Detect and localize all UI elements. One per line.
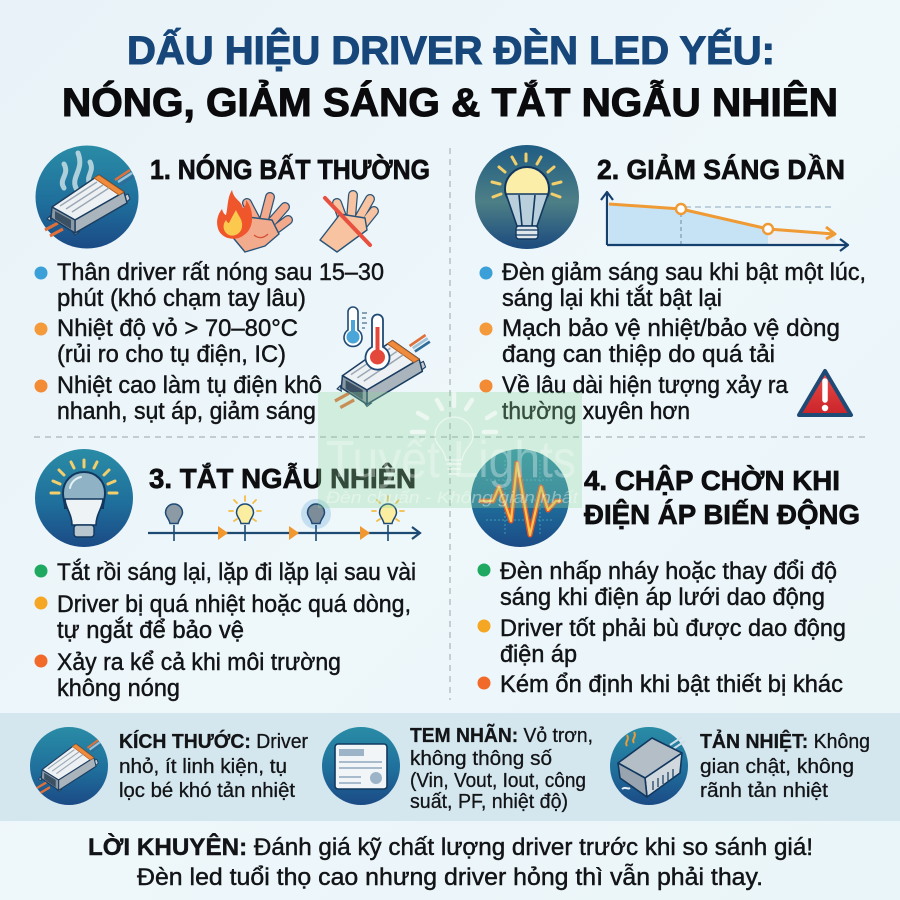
- bullet list: điện áp: [500, 641, 577, 668]
- text: kích thước: lọc bé khó tản nhiệt: [119, 780, 295, 802]
- bullet list: Xảy ra kể cả khi môi trường: [57, 649, 341, 676]
- icon: hot driver: [36, 146, 138, 248]
- bullet list: Đèn giảm sáng sau khi bật một lúc,: [502, 259, 866, 286]
- advice footer: LỜI KHUYÊN: Đánh giá kỹ chất lượng driver trước khi so sánh giá!: [88, 833, 813, 861]
- panel: 1. nóng bất thường: [34, 146, 430, 425]
- text: tản nhiệt: rãnh tản nhiệt: [700, 780, 828, 802]
- bullet list: Về lâu dài hiện tượng xảy ra: [502, 372, 788, 399]
- heading: 3. TẮT NGẪU NHIÊN: [149, 463, 416, 494]
- advice footer: Đèn led tuổi thọ cao nhưng driver hỏng thì vẫn phải thay.: [137, 864, 763, 891]
- text: kích thước: nhỏ, ít linh kiện, tụ: [119, 756, 287, 778]
- bullet list: Nhiệt độ vỏ > 70–80°C: [57, 315, 298, 342]
- bullet list: Kém ổn định khi bật thiết bị khác: [500, 671, 843, 698]
- icon: small driver: [30, 727, 108, 805]
- bullet list: (rủi ro cho tụ điện, IC): [57, 341, 286, 368]
- icon: blank label: [322, 727, 400, 805]
- heading: 1. NÓNG BẤT THƯỜNG: [150, 154, 430, 185]
- text: kích thước: KÍCH THƯỚC: Driver: [119, 729, 308, 753]
- watermark: [318, 392, 582, 508]
- bullet list: [480, 259, 866, 425]
- text: tản nhiệt: gian chật, không: [700, 756, 854, 778]
- bullet list: Mạch bảo vệ nhiệt/bảo vệ dòng: [502, 315, 840, 342]
- icon: sealed housing: [610, 727, 688, 805]
- item: tản nhiệt: [610, 727, 870, 805]
- text: tem nhãn: (Vin, Vout, Iout, công: [410, 770, 586, 792]
- panel: 2. giảm sáng dần: [475, 145, 866, 425]
- panel: 4. chập chờn: [471, 449, 860, 698]
- panel: 3. tắt ngẫu nhiên: [34, 449, 420, 702]
- bullet list: [478, 558, 846, 698]
- text: tản nhiệt: TẢN NHIỆT: Không: [700, 729, 870, 753]
- bullet list: phút (khó chạm tay lâu): [57, 285, 306, 312]
- heading: [584, 465, 860, 530]
- bullet list: Đèn nhấp nháy hoặc thay đổi độ: [500, 558, 837, 585]
- bullet list: tự ngắt để bảo vệ: [57, 617, 244, 644]
- icon: driver with thermometers: [335, 307, 430, 408]
- heading: 2. GIẢM SÁNG DẦN: [597, 153, 845, 185]
- bullet list: [34, 259, 384, 425]
- bullet list: Nhiệt cao làm tụ điện khô: [57, 372, 322, 399]
- watermark: Đèn chuẩn - Không gian nhất: [326, 488, 579, 507]
- heading: ĐIỆN ÁP BIẾN ĐỘNG: [584, 498, 860, 530]
- text: kích thước: [119, 729, 308, 802]
- icon: burning hand: [217, 190, 288, 252]
- chart: brightness decline: [601, 192, 848, 251]
- icon: dim bulb: [475, 145, 579, 249]
- icon: off bulb: [35, 449, 133, 547]
- item: kích thước: [30, 727, 308, 805]
- text: tản nhiệt: [700, 729, 870, 802]
- text: tem nhãn: không thông số: [410, 748, 552, 770]
- icon: crossed hand: [320, 195, 374, 252]
- bullet list: [34, 559, 416, 702]
- advice footer: [88, 833, 813, 891]
- item: tem nhãn: [322, 724, 593, 813]
- title: NÓNG, GIẢM SÁNG & TẮT NGẪU NHIÊN: [62, 79, 838, 125]
- bullet list: không nóng: [57, 675, 180, 702]
- bullet list: đang can thiệp do quá tải: [502, 341, 775, 368]
- bullet list: Thân driver rất nóng sau 15–30: [57, 259, 384, 286]
- icon: voltage pulse: [471, 449, 569, 547]
- bullet list: thường xuyên hơn: [502, 398, 690, 425]
- text: tem nhãn: [410, 724, 593, 813]
- heading: 4. CHẬP CHỜN KHI: [584, 465, 840, 496]
- panel: bottom strip: [0, 713, 900, 821]
- bullet list: nhanh, sụt áp, giảm sáng: [57, 398, 316, 425]
- text: tem nhãn: TEM NHÃN: Vỏ trơn,: [410, 724, 593, 747]
- text: tem nhãn: suất, PF, nhiệt độ): [410, 791, 568, 813]
- bullet list: Tắt rồi sáng lại, lặp đi lặp lại sau vài: [57, 559, 416, 586]
- chart: random on-off timeline: [148, 496, 420, 541]
- bullet list: Driver tốt phải bù được dao động: [500, 615, 846, 642]
- bullet list: sáng khi điện áp lưới dao động: [500, 584, 825, 611]
- watermark: Tuyết Lights: [326, 431, 576, 489]
- bullet list: sáng lại khi tắt bật lại: [502, 285, 722, 312]
- title: [62, 27, 838, 125]
- icon: warning triangle: [799, 371, 851, 415]
- title: DẤU HIỆU DRIVER ĐÈN LED YẾU:: [127, 27, 775, 73]
- bullet list: Driver bị quá nhiệt hoặc quá dòng,: [57, 591, 411, 618]
